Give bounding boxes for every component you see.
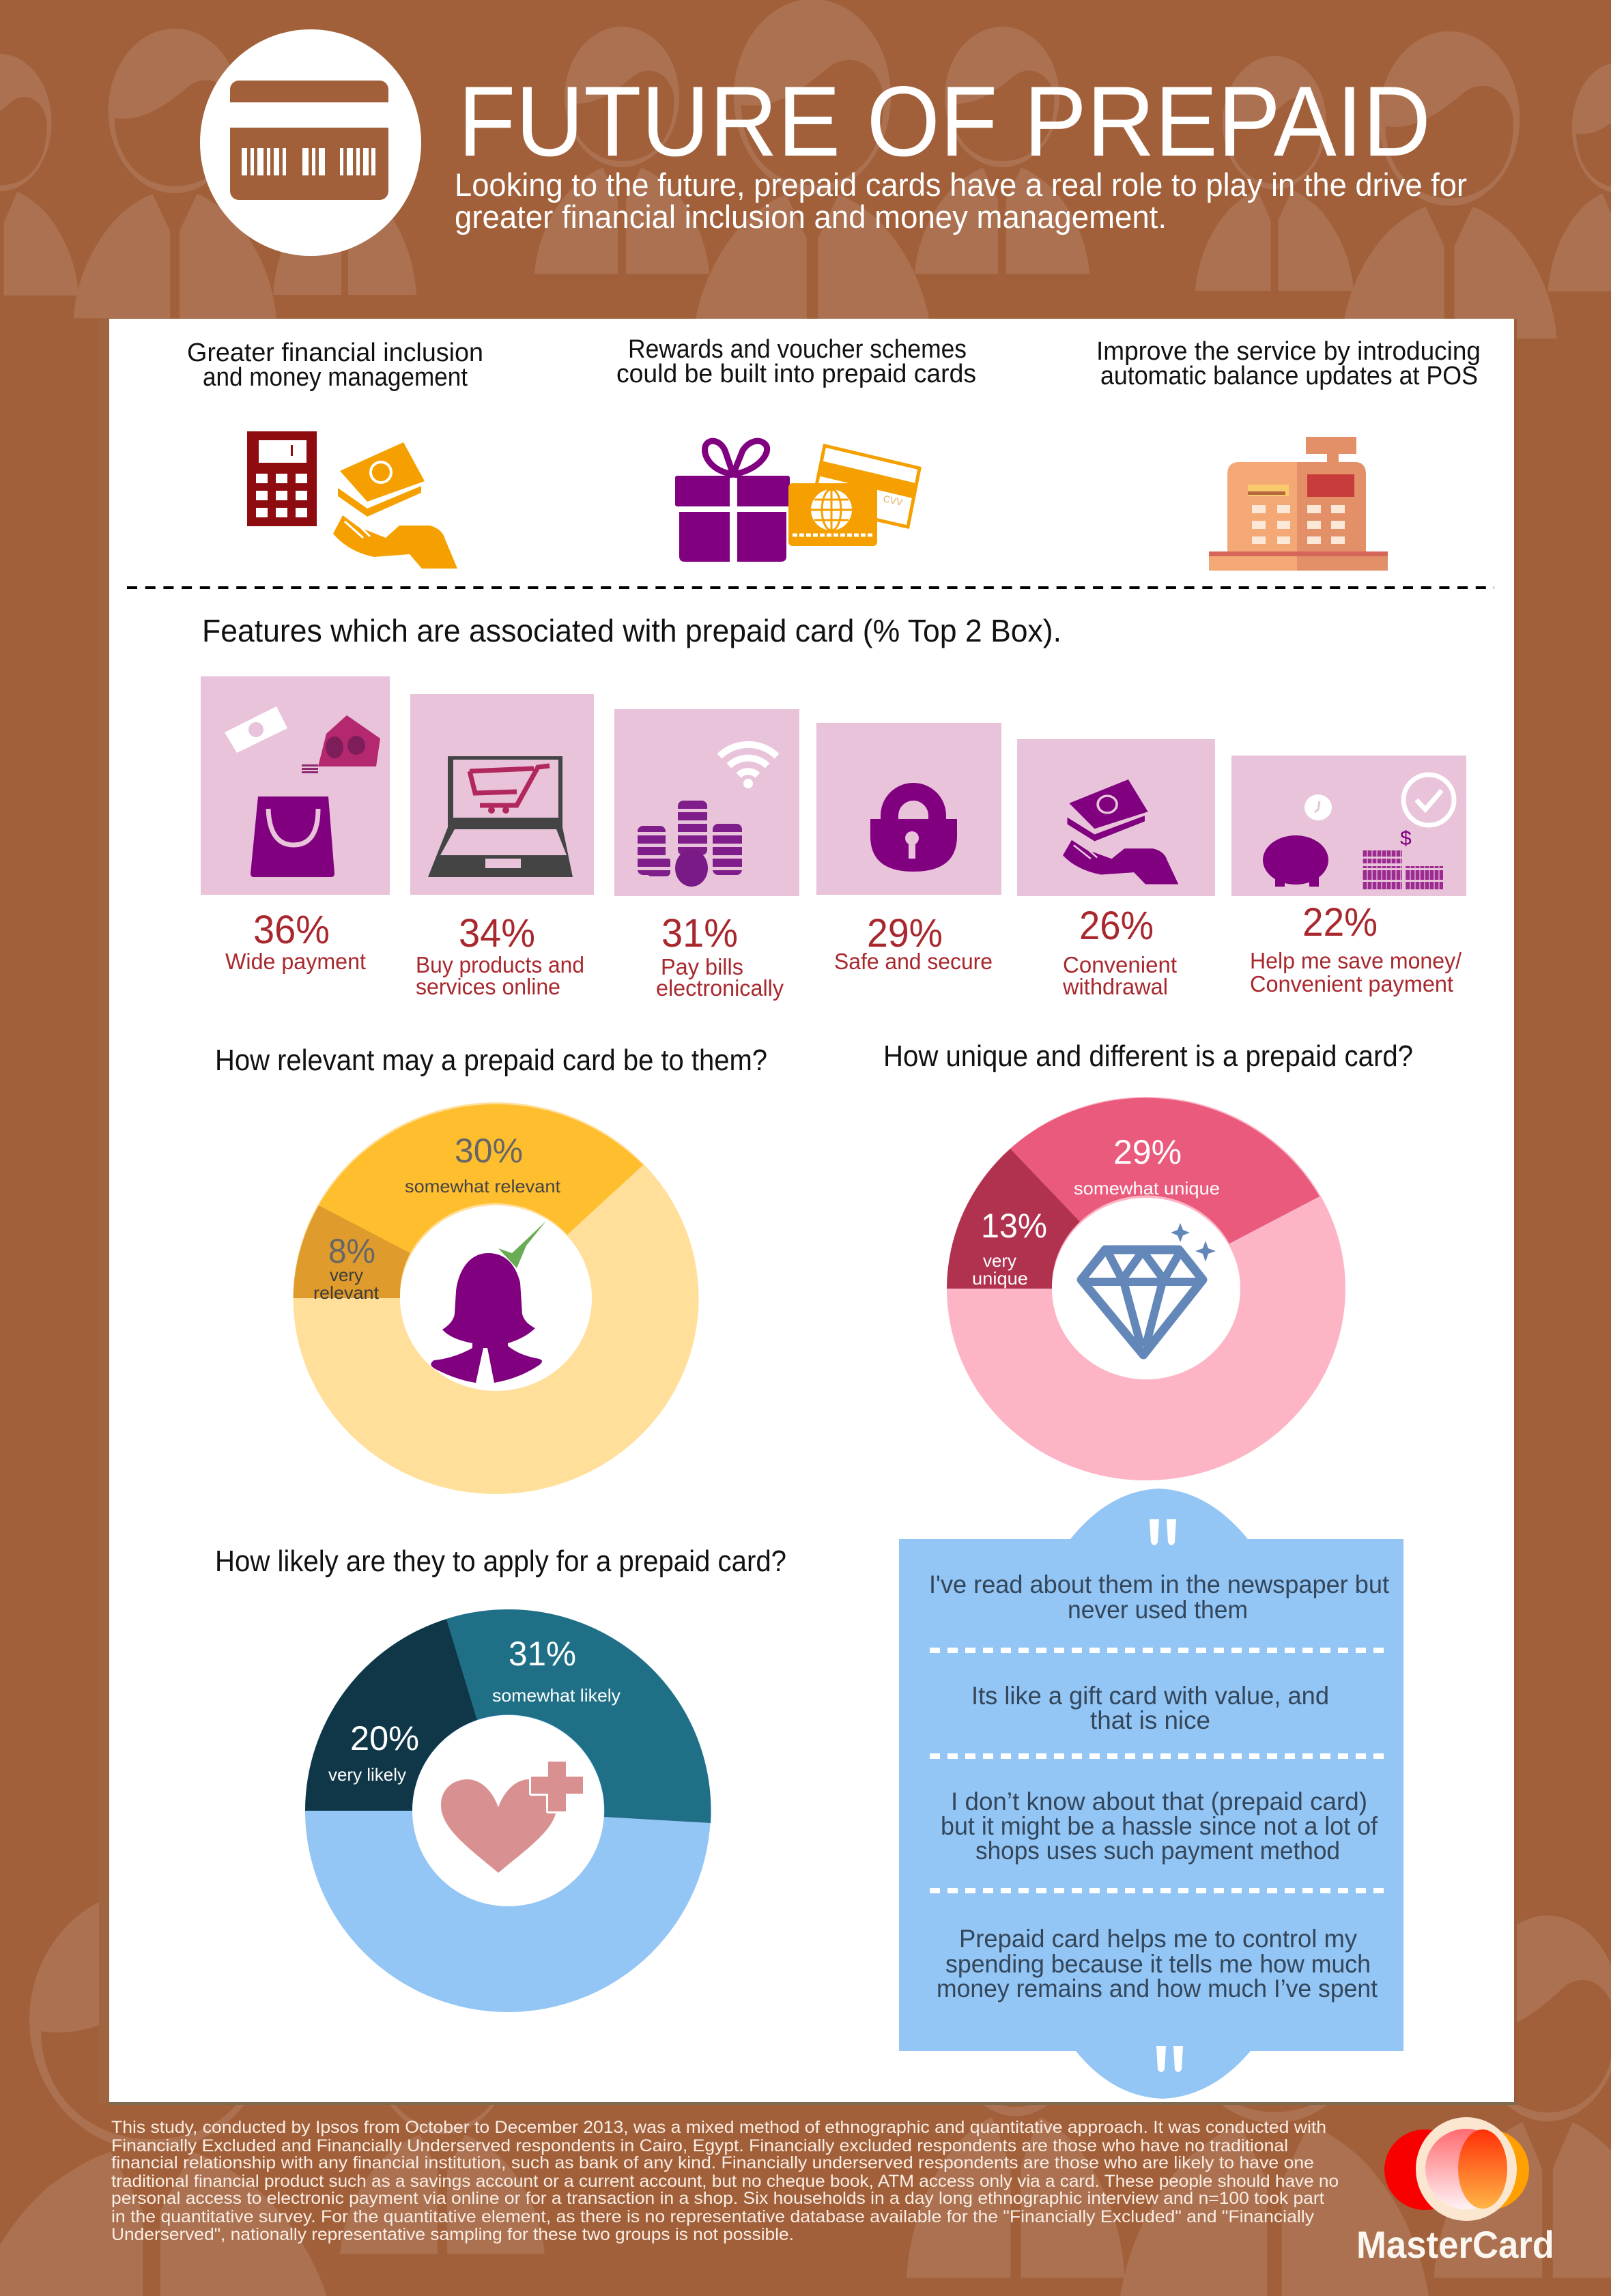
icon: credit card badge	[200, 29, 421, 256]
text: quote 4: money remains and how much I’ve spent	[937, 1975, 1378, 2003]
icon: opening quote mark	[1150, 1519, 1176, 1545]
label: 29% somewhat unique: 29%	[1113, 1133, 1182, 1171]
title: FUTURE OF PREPAID	[458, 66, 1431, 177]
stat: 26% convenient withdrawal: Convenient	[1063, 952, 1177, 977]
icon: laptop with cart	[428, 756, 573, 877]
heading: likelihood: How likely are they to apply for a prepaid card?	[215, 1545, 786, 1578]
icon: money and hand	[333, 442, 457, 569]
text: methodology footnote: traditional financial product such as a savings account or a current account, but no cheque book, ATM access only via a card. These people should have no	[111, 2172, 1339, 2191]
panel: safe and secure	[816, 723, 1001, 895]
text: methodology footnote: in the quantitative survey. For the quantitative element, as there is no representative database available for the "Financially Excluded" and "Financially	[111, 2207, 1315, 2226]
stat: 34% buy online: Buy products and	[416, 952, 584, 977]
text: financial inclusion caption: Greater financial inclusion	[187, 339, 483, 367]
label: 13% very unique: unique	[972, 1268, 1028, 1289]
text: methodology footnote: financial relationship with any financial institution, such as bank of any kind. Financially underserved respondents are those who are likely to have one	[111, 2153, 1314, 2172]
panel: quotes	[899, 1489, 1403, 2099]
text: balance updates caption: Improve the service by introducing	[1096, 337, 1481, 366]
text: quote 3: shops uses such payment method	[975, 1837, 1340, 1865]
donut chart: uniqueness	[947, 1097, 1345, 1480]
icon: payment cards: CVV	[882, 493, 904, 508]
label: 8% very relevant: very	[330, 1265, 363, 1285]
stat: 36% wide payment	[225, 908, 366, 974]
logo: MasterCard	[1356, 2117, 1554, 2266]
panel: pay bills	[614, 709, 799, 896]
panel: wide payment	[201, 676, 390, 895]
icon: coin stacks	[638, 801, 742, 887]
panel: convenient withdrawal	[1017, 739, 1215, 896]
label: 8% very relevant: relevant	[313, 1282, 380, 1303]
subtitle	[455, 167, 1467, 235]
heading: features: Features which are associated with prepaid card (% Top 2 Box).	[202, 613, 1061, 648]
stat: 31% pay bills: 31%	[661, 911, 738, 956]
text: rewards caption	[616, 335, 976, 388]
text: rewards caption: Rewards and voucher schemes	[628, 335, 967, 364]
stat: 31% pay bills	[656, 911, 784, 1001]
panel: save money	[1231, 756, 1466, 896]
stat: 29% safe and secure: 29%	[867, 911, 943, 956]
label: 31% somewhat likely	[492, 1635, 621, 1706]
icon: padlock	[870, 792, 957, 872]
subtitle: greater financial inclusion and money management.	[455, 199, 1167, 235]
icon: woman with check	[431, 1221, 546, 1383]
label: 29% somewhat unique: somewhat unique	[1074, 1178, 1220, 1199]
text: quote 3	[941, 1788, 1378, 1865]
panel: buy online	[410, 694, 594, 895]
icon: stacked coins	[1363, 850, 1443, 889]
icon: dollar sign: $	[1400, 827, 1412, 850]
label: 20% very likely: 20%	[350, 1719, 419, 1757]
donut chart: likelihood	[305, 1609, 711, 2012]
stat: 34% buy online: services online	[416, 974, 560, 999]
stat: 31% pay bills: Pay bills	[661, 954, 743, 979]
logo: MasterCard: MasterCard	[1356, 2223, 1554, 2266]
label: 30% somewhat relevant: somewhat relevant	[405, 1176, 561, 1196]
text: quote 1: I've read about them in the newspaper but	[929, 1570, 1390, 1598]
icon: closing quote mark	[1156, 2046, 1183, 2072]
text: methodology footnote	[111, 2118, 1339, 2244]
panel: white content card	[99, 319, 1517, 2105]
text: quote 3: I don’t know about that (prepaid card)	[951, 1788, 1367, 1816]
icon: calculator	[247, 431, 317, 526]
label: 30% somewhat relevant	[405, 1132, 561, 1196]
icon: coin	[1305, 794, 1332, 820]
stat: 29% safe and secure: Safe and secure	[834, 949, 993, 974]
stat: 31% pay bills: electronically	[656, 975, 784, 1001]
icon: money and hand	[1063, 779, 1178, 885]
label: 31% somewhat likely: 31%	[509, 1635, 576, 1673]
label: 31% somewhat likely: somewhat likely	[492, 1685, 621, 1706]
text: balance updates caption: automatic balance updates at POS	[1100, 362, 1478, 390]
text: quote 1	[929, 1570, 1390, 1624]
text: quote 4: Prepaid card helps me to control my	[959, 1925, 1357, 1953]
label: 20% very likely	[328, 1719, 419, 1785]
text: quote 2: that is nice	[1090, 1706, 1210, 1734]
text: quote 3: but it might be a hassle since not a lot of	[941, 1812, 1378, 1840]
text: methodology footnote: Financially Excluded and Financially Underserved respondents in Cairo, Egypt. Financially excluded respondents are those who have no traditional	[111, 2136, 1288, 2155]
text: quote 4	[937, 1925, 1378, 2003]
stat: 26% convenient withdrawal: withdrawal	[1062, 974, 1168, 999]
label: 30% somewhat relevant: 30%	[455, 1132, 523, 1170]
label: 29% somewhat unique	[1074, 1133, 1220, 1199]
stat: 36% wide payment: Wide payment	[225, 949, 366, 974]
text: quote 2: Its like a gift card with value, and	[971, 1682, 1329, 1710]
label: 13% very unique: very	[983, 1250, 1016, 1271]
label: 8% very relevant	[313, 1232, 380, 1303]
donut chart: relevance	[294, 1102, 699, 1494]
stat: 34% buy online: 34%	[459, 911, 535, 956]
icon: heart plus	[441, 1762, 583, 1873]
subtitle: Looking to the future, prepaid cards have a real role to play in the drive for	[455, 167, 1467, 203]
stat: 22% save money	[1250, 900, 1462, 996]
icon: diamond	[1081, 1223, 1216, 1355]
icon: banknote	[225, 706, 287, 753]
icon: payment cards	[788, 446, 919, 546]
label: 13% very unique	[972, 1207, 1047, 1289]
stat: 22% save money: 22%	[1302, 900, 1378, 945]
stat: 26% convenient withdrawal	[1062, 904, 1177, 999]
stat: 36% wide payment: 36%	[253, 908, 330, 952]
label: 20% very likely: very likely	[328, 1764, 406, 1785]
text: financial inclusion caption	[187, 339, 483, 392]
text: rewards caption: could be built into prepaid cards	[616, 360, 976, 388]
heading: relevance: How relevant may a prepaid card be to them?	[215, 1044, 767, 1077]
icon: wifi	[719, 745, 777, 786]
stat: 22% save money: Convenient payment	[1250, 971, 1453, 996]
stat: 22% save money: Help me save money/	[1250, 948, 1462, 973]
stat: 29% safe and secure	[834, 911, 993, 974]
text: quote 4: spending because it tells me how much	[945, 1950, 1371, 1978]
label: 13% very unique: 13%	[981, 1207, 1047, 1245]
icon: piggy bank	[1263, 835, 1328, 887]
text: balance updates caption	[1096, 337, 1481, 390]
text: financial inclusion caption: and money management	[203, 363, 468, 392]
text: methodology footnote: personal access to electronic payment via online or for a transaction in a shop. Six households in a day long ethnographic interview and n=100 took part	[111, 2189, 1324, 2208]
text: methodology footnote: This study, conducted by Ipsos from October to December 2013, was a mixed method of ethnographic and quantitative approach. It was conducted with	[111, 2118, 1326, 2137]
text: methodology footnote: Underserved", nationally representative sampling for these two groups is not possible.	[111, 2225, 794, 2244]
text: quote 2	[971, 1682, 1329, 1734]
stat: 34% buy online	[416, 911, 584, 999]
icon: check circle	[1403, 775, 1454, 825]
stat: 26% convenient withdrawal: 26%	[1079, 904, 1154, 948]
icon: shopping bag	[251, 797, 334, 877]
label: 8% very relevant: 8%	[328, 1232, 375, 1270]
icon: cash register	[1209, 437, 1388, 571]
icon: wallet and coins	[302, 715, 380, 773]
text: quote 1: never used them	[1068, 1596, 1248, 1624]
icon: gift box	[675, 441, 790, 562]
heading: uniqueness: How unique and different is a prepaid card?	[883, 1039, 1413, 1073]
